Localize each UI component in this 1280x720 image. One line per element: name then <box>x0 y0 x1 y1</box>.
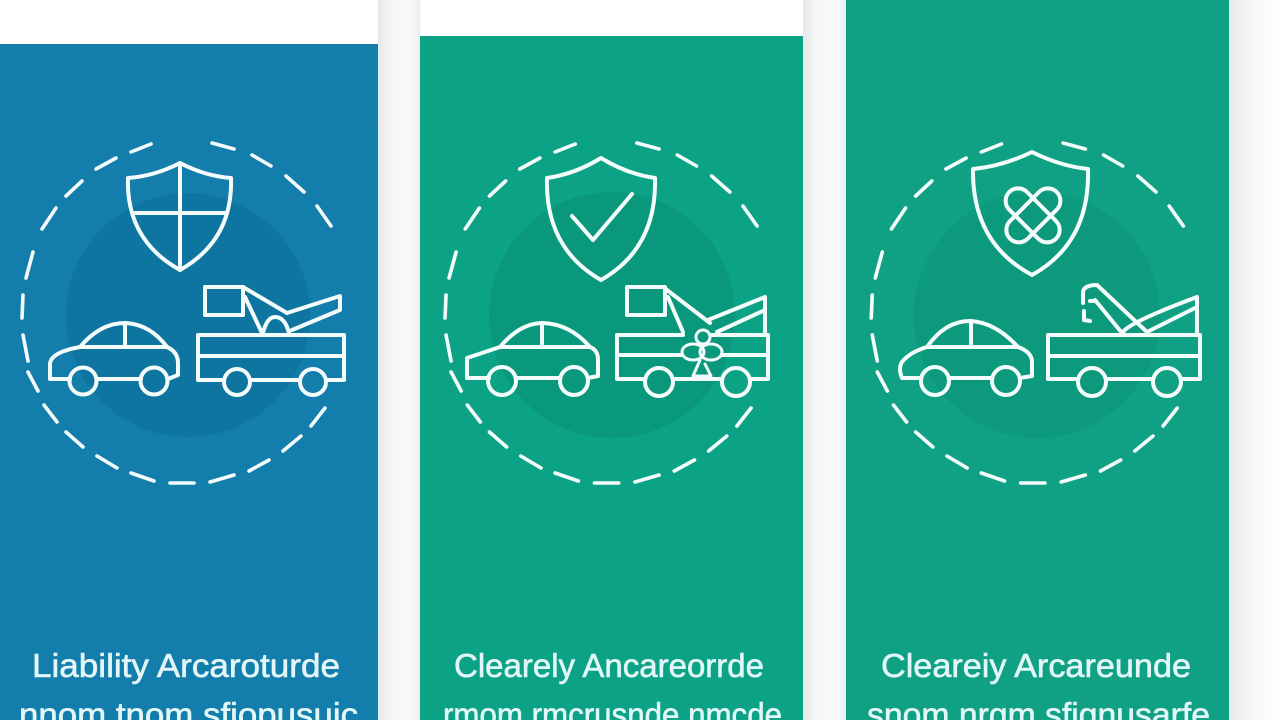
panel: clearly covered (green, bandage shield) <box>846 0 1229 720</box>
heading: Liability Arcaroturde <box>32 647 340 684</box>
heading: Clearely Ancareorrde <box>454 647 764 684</box>
icon: tow truck <box>198 287 344 395</box>
inner dark circle <box>489 192 735 438</box>
icon: tow truck <box>617 287 768 396</box>
panel: liability coverage (blue) <box>0 44 378 720</box>
dashed ring <box>871 143 1183 483</box>
icon: shield with bandage <box>973 152 1088 275</box>
icon: tangled damage mark <box>682 330 722 376</box>
icon: car <box>50 323 178 394</box>
icon: shield with check <box>547 158 655 280</box>
panel: clearly covered (green, check shield) <box>420 36 803 720</box>
inner dark circle <box>66 193 310 437</box>
icon: car <box>900 321 1032 395</box>
dashed ring <box>445 143 757 483</box>
dashed ring <box>22 143 331 483</box>
icon: tow truck <box>1048 285 1200 396</box>
heading: Cleareiy Arcareunde <box>881 647 1191 684</box>
inner dark circle <box>914 192 1160 438</box>
icon: car <box>467 323 598 395</box>
icon: shield with cross <box>128 163 231 270</box>
